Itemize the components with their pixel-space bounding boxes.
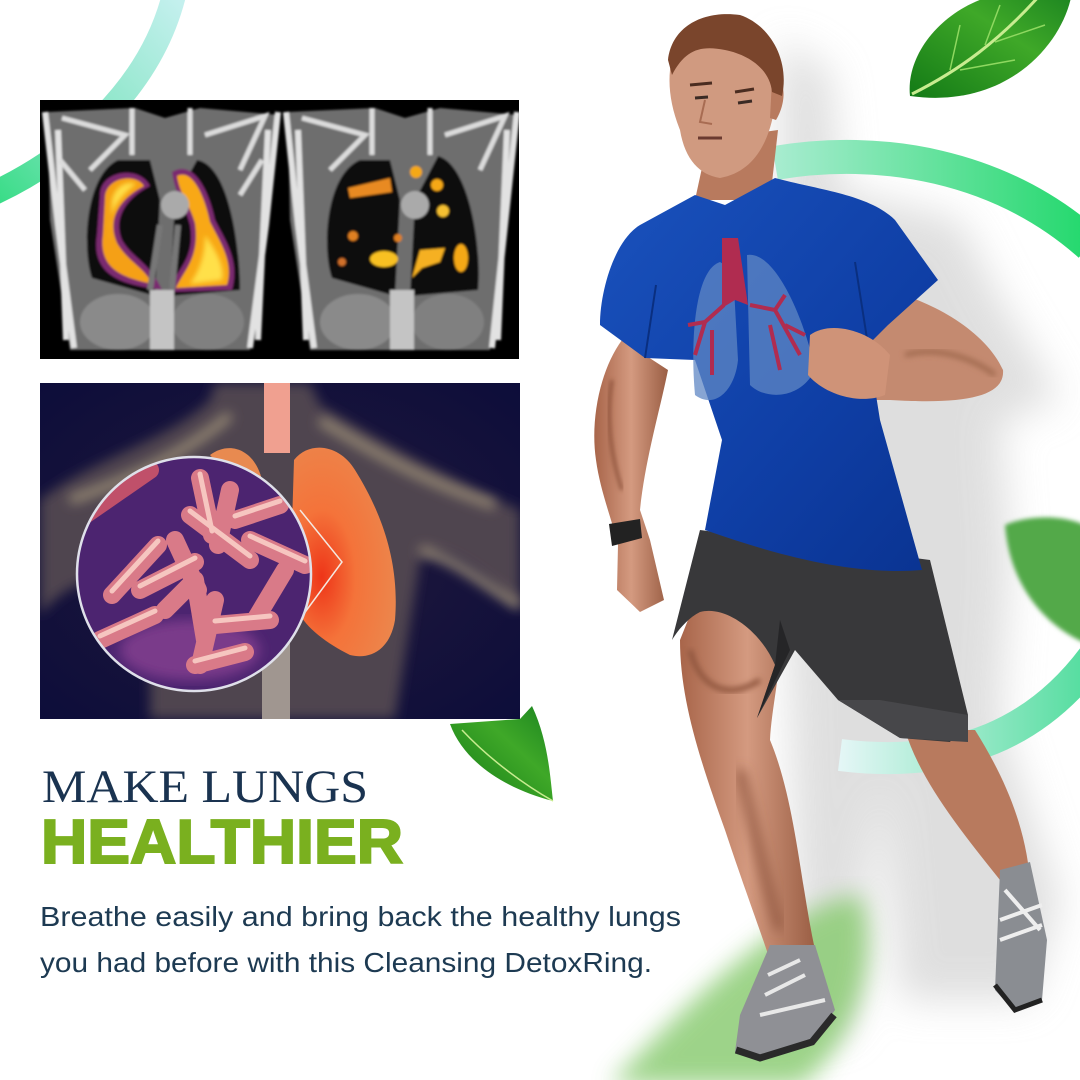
decorative ring lower right [840,655,1080,758]
title line 1: MAKE LUNGS [42,761,368,813]
magnifier arrow [300,510,342,615]
head [669,29,779,178]
title [41,761,403,877]
panel: bacteria in lungs [40,383,520,719]
body silhouette [40,383,520,719]
body text: Breathe easily and bring back the healthy lungs [40,901,681,932]
MRI scan right [286,108,518,350]
spine and trachea [264,383,290,453]
hair [668,14,784,96]
magnifier circle [77,457,311,691]
front arm [805,290,1003,401]
lung [290,448,396,656]
man's cast shadow [780,40,1060,1040]
neck [695,130,778,200]
blurred leaf right [1005,517,1080,645]
decorative ring right [775,157,1080,245]
back arm [594,340,668,612]
shirt [600,178,938,571]
forearm hand [808,328,890,399]
ear [770,79,784,120]
watch [609,519,642,546]
body text: you had before with this Cleansing DetoxRing. [40,947,652,978]
shorts [672,530,968,742]
panel: MRI lung scans [40,100,519,359]
lungs on shirt [688,238,815,400]
front leg [680,590,815,960]
leaf top right [910,0,1072,98]
decorative arc top left [0,0,174,195]
blurred leaf bottom [610,895,868,1080]
title line 2: HEALTHIER [41,808,403,877]
shoe [735,945,835,1060]
body text [40,901,681,978]
leaf below panel [450,706,553,801]
MRI scan left [45,108,280,350]
face details [690,83,754,92]
runner [594,14,1047,1060]
back leg [905,730,1030,880]
